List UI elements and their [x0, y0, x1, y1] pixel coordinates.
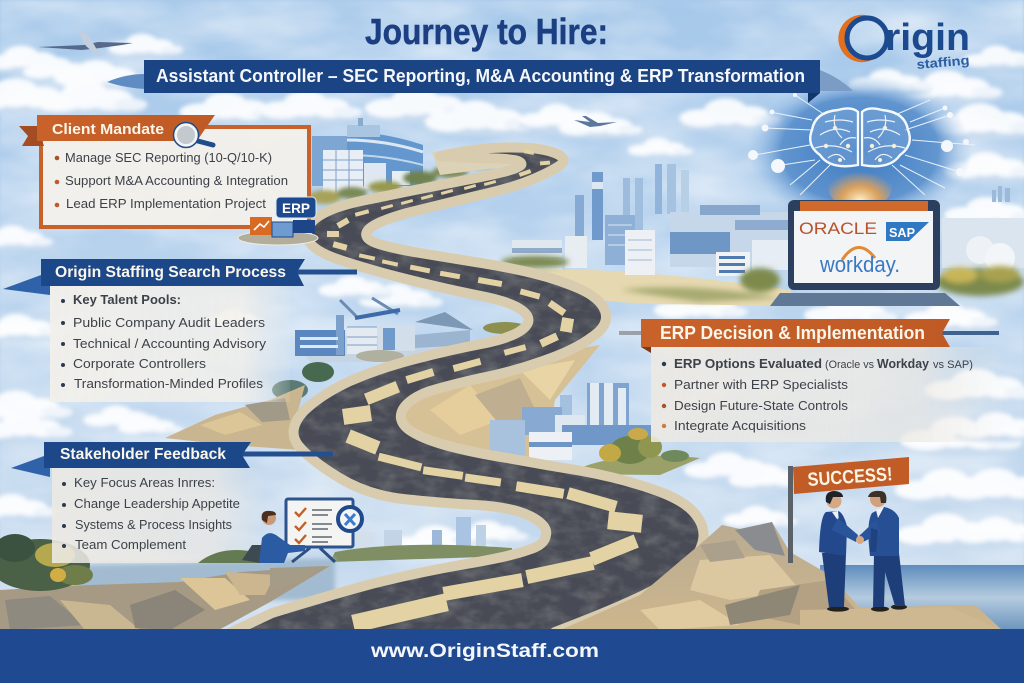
icon: ERP stack: ERP: [282, 200, 310, 216]
ribbon: ERP heading: ERP Decision & Implementation: [660, 323, 925, 343]
list: mandate items: Support M&A Accounting & Integration: [65, 174, 288, 188]
panel: stakeholder feedback: [11, 442, 333, 563]
airplane: small: [574, 116, 617, 127]
city: right skyline: [512, 164, 1024, 276]
ribbon: client mandate heading: Client Mandate: [52, 121, 164, 138]
ribbon: search process heading: [3, 259, 357, 295]
logo: SAP: [886, 222, 929, 241]
tree cluster: island shore: [560, 428, 700, 475]
flag: success: SUCCESS!: [807, 464, 893, 491]
icon: magnifying glass: [174, 122, 213, 148]
logo: Origin Staffing: [838, 15, 970, 72]
list: talent pools: Technical / Accounting Advisory: [73, 337, 267, 351]
list: focus areas: Team Complement: [75, 538, 187, 552]
small city: lower left: [330, 517, 512, 562]
icon: brain network: [748, 75, 975, 225]
list: ERP items: [662, 357, 973, 433]
list: talent pools: Transformation-Minded Profiles: [74, 377, 263, 391]
list: talent pools: Key Talent Pools:: [73, 293, 181, 307]
logo: Origin Staffing: staffing: [916, 52, 970, 72]
rocks: left cliff: [165, 385, 305, 450]
road: winding highway: [200, 140, 720, 640]
water: sea right: [820, 565, 1024, 630]
trees: bottom left: [0, 534, 93, 591]
city: plant left of road: [272, 298, 527, 400]
icon: person at checklist board: [198, 499, 362, 563]
list: ERP items: vs SAP): [933, 359, 973, 371]
list: ERP items: Workday: [877, 357, 929, 371]
icon: ERP stack: [238, 197, 318, 245]
ribbon: client mandate heading: [19, 115, 215, 146]
list: talent pools: Public Company Audit Leaders: [73, 316, 265, 330]
panel: search process: [3, 259, 357, 402]
logo: Workday: workday.: [819, 252, 900, 277]
rocks: island centre: [400, 345, 600, 462]
flag: success: [788, 457, 909, 563]
water: left shore: [60, 558, 335, 600]
logo: SAP: SAP: [889, 225, 915, 240]
footer website: www.OriginStaff.com: [370, 641, 599, 662]
rocks: success headland: [556, 522, 1002, 632]
title: Journey to Hire:: [365, 11, 608, 52]
ribbon: search process heading: Origin Staffing Search Process: [55, 264, 286, 281]
list: mandate items: Manage SEC Reporting (10-Q/10-K): [65, 151, 272, 165]
land: right horizon: [505, 269, 800, 306]
city: plant in island: [490, 383, 651, 460]
logo: Oracle: ORACLE: [799, 220, 877, 238]
list: ERP items: ERP Options Evaluated: [674, 357, 822, 371]
banner: subtitle: Assistant Controller – SEC Reporting, M&A Accounting & ERP Transformation: [156, 66, 805, 86]
list: ERP items: Integrate Acquisitions: [674, 419, 806, 433]
list: talent pools: Corporate Controllers: [73, 357, 206, 371]
footer bar: [0, 629, 1024, 683]
list: mandate items: [55, 151, 288, 211]
icon: laptop with ERP logos: [770, 200, 960, 306]
list: focus areas: Systems & Process Insights: [75, 518, 232, 532]
ribbon: stakeholder heading: [11, 442, 333, 477]
list: focus areas: Change Leadership Appetite: [74, 497, 240, 511]
airplane: top left: [38, 28, 133, 57]
rocks: bottom left: [0, 566, 330, 632]
panel: client mandate: [19, 115, 318, 245]
panel: ERP decision: [619, 319, 1006, 442]
list: talent pools: [61, 293, 267, 391]
city: top left buildings: [309, 118, 530, 204]
list: ERP items: Partner with ERP Specialists: [674, 378, 848, 392]
banner: subtitle: [107, 60, 853, 103]
list: focus areas: Key Focus Areas Inrres:: [74, 476, 215, 490]
ribbon: stakeholder heading: Stakeholder Feedback: [60, 446, 226, 463]
list: ERP items: Design Future-State Controls: [674, 399, 848, 413]
road lane markings: [327, 149, 643, 633]
logo: Origin Staffing: rigin: [885, 17, 970, 59]
bushes: horizon: [501, 256, 1024, 302]
list: focus areas: [62, 476, 240, 552]
ribbon: ERP heading: [619, 319, 999, 353]
list: mandate items: Lead ERP Implementation Project: [66, 197, 267, 211]
figures: handshake: [819, 491, 907, 612]
list: ERP items: (Oracle vs: [825, 359, 874, 371]
